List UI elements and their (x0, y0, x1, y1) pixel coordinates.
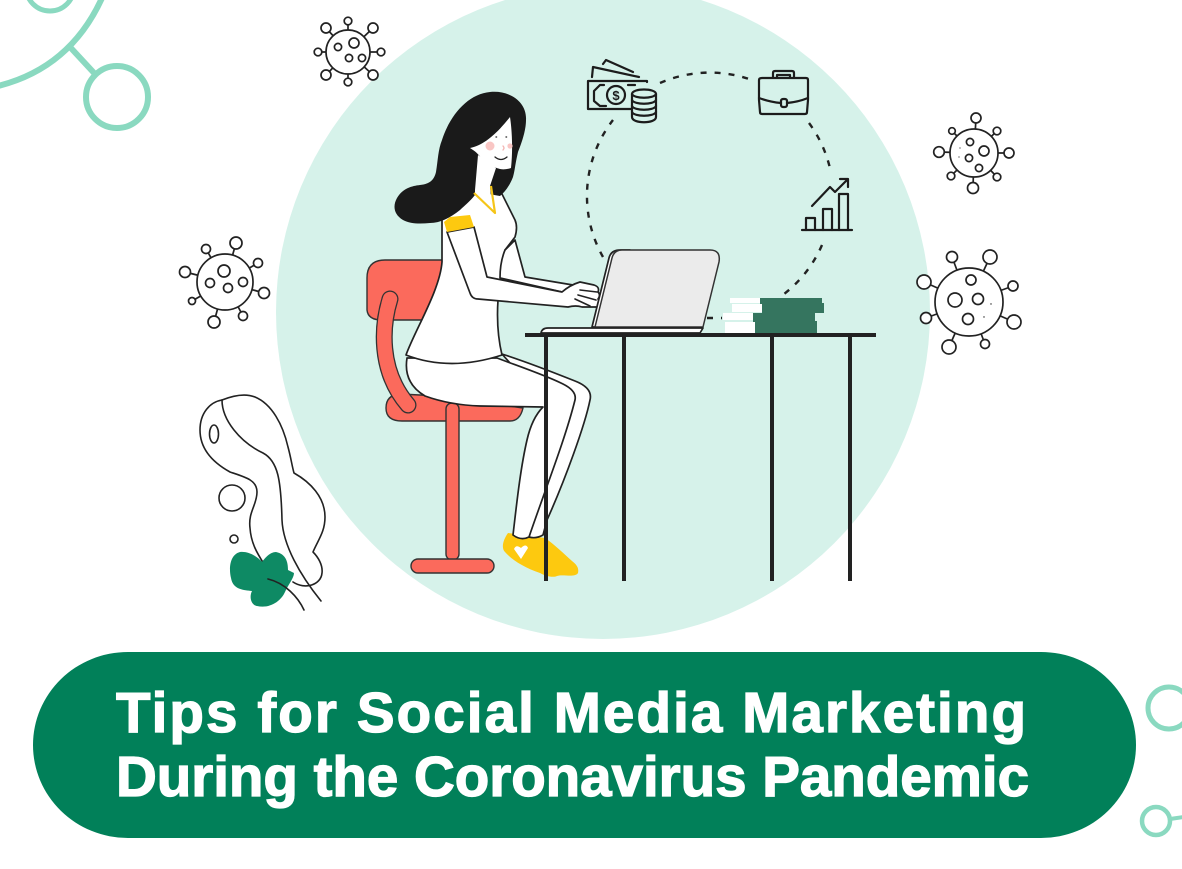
dashed circle connector (587, 73, 831, 318)
torso (406, 190, 516, 364)
right molecule decoration (1142, 687, 1182, 835)
title: During the Coronavirus Pandemic (116, 745, 1029, 808)
chair support tube (384, 299, 408, 405)
chair seat (386, 394, 523, 421)
icon: virus upper right (934, 113, 1014, 194)
heart on shoe (514, 546, 528, 559)
laptop (541, 250, 719, 333)
cheeks (486, 142, 513, 150)
chair back (367, 260, 445, 320)
eyes and smile (495, 137, 507, 160)
book pages (723, 298, 764, 333)
icon: growth chart (802, 179, 852, 230)
finger lines (575, 290, 597, 306)
title: Tips for Social Media Marketing (116, 681, 1026, 744)
far leg (502, 354, 590, 538)
background circle (276, 0, 930, 639)
neck (475, 155, 496, 210)
icon: money and coins: $ (612, 88, 620, 103)
title banner (33, 652, 1136, 838)
shoulder band (444, 215, 474, 232)
chair base (411, 559, 494, 573)
book covers (753, 298, 824, 333)
icon: briefcase (759, 71, 808, 114)
laptop screen (595, 250, 719, 327)
woman (395, 92, 600, 577)
hair (395, 92, 526, 224)
near leg (406, 358, 575, 539)
laptop screen back (592, 250, 630, 327)
icon: virus lower right (917, 250, 1021, 354)
icon: money and coins (588, 60, 656, 122)
top-left molecule decoration (0, 0, 148, 128)
table (525, 333, 876, 581)
stack of books (723, 298, 824, 333)
icon: virus top centre (314, 17, 385, 86)
plant illustration (200, 395, 325, 610)
far arm (500, 240, 600, 307)
necklace (474, 186, 495, 213)
chair post (446, 403, 459, 560)
near arm (447, 227, 600, 307)
leaf (230, 552, 294, 607)
icon: virus left (180, 237, 270, 328)
laptop base (541, 328, 703, 333)
shoe (503, 533, 578, 577)
face (470, 117, 512, 169)
